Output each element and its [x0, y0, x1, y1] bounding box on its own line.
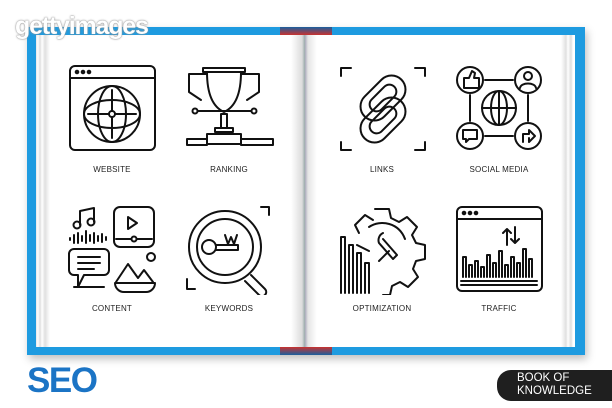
label: content: CONTENT	[92, 304, 132, 313]
label: traffic: TRAFFIC	[481, 304, 517, 313]
spine tab top	[280, 27, 332, 35]
icon: website	[69, 65, 156, 151]
label: keywords: KEYWORDS	[205, 304, 253, 313]
badge: book of knowledge: BOOK OF	[517, 372, 569, 384]
icon: ranking	[186, 67, 274, 146]
icon: links	[340, 67, 426, 151]
icon: traffic	[456, 206, 543, 292]
label: ranking: RANKING	[210, 165, 248, 174]
badge: book of knowledge	[497, 370, 612, 401]
label: website: WEBSITE	[93, 165, 131, 174]
badge: book of knowledge: KNOWLEDGE	[517, 385, 592, 397]
book cover	[27, 27, 585, 355]
icon: optimization	[340, 208, 426, 295]
right page	[305, 35, 575, 347]
left page	[36, 35, 305, 347]
title: SEO: SEO	[27, 361, 96, 400]
label: optimization: OPTIMIZATION	[353, 304, 411, 313]
icon: content	[68, 206, 156, 293]
spine tab bottom	[280, 347, 332, 355]
icon: keywords	[186, 206, 270, 295]
watermark: gettyimages	[15, 12, 148, 40]
icon: social media	[456, 66, 542, 150]
label: links: LINKS	[370, 165, 394, 174]
label: social media: SOCIAL MEDIA	[469, 165, 528, 174]
